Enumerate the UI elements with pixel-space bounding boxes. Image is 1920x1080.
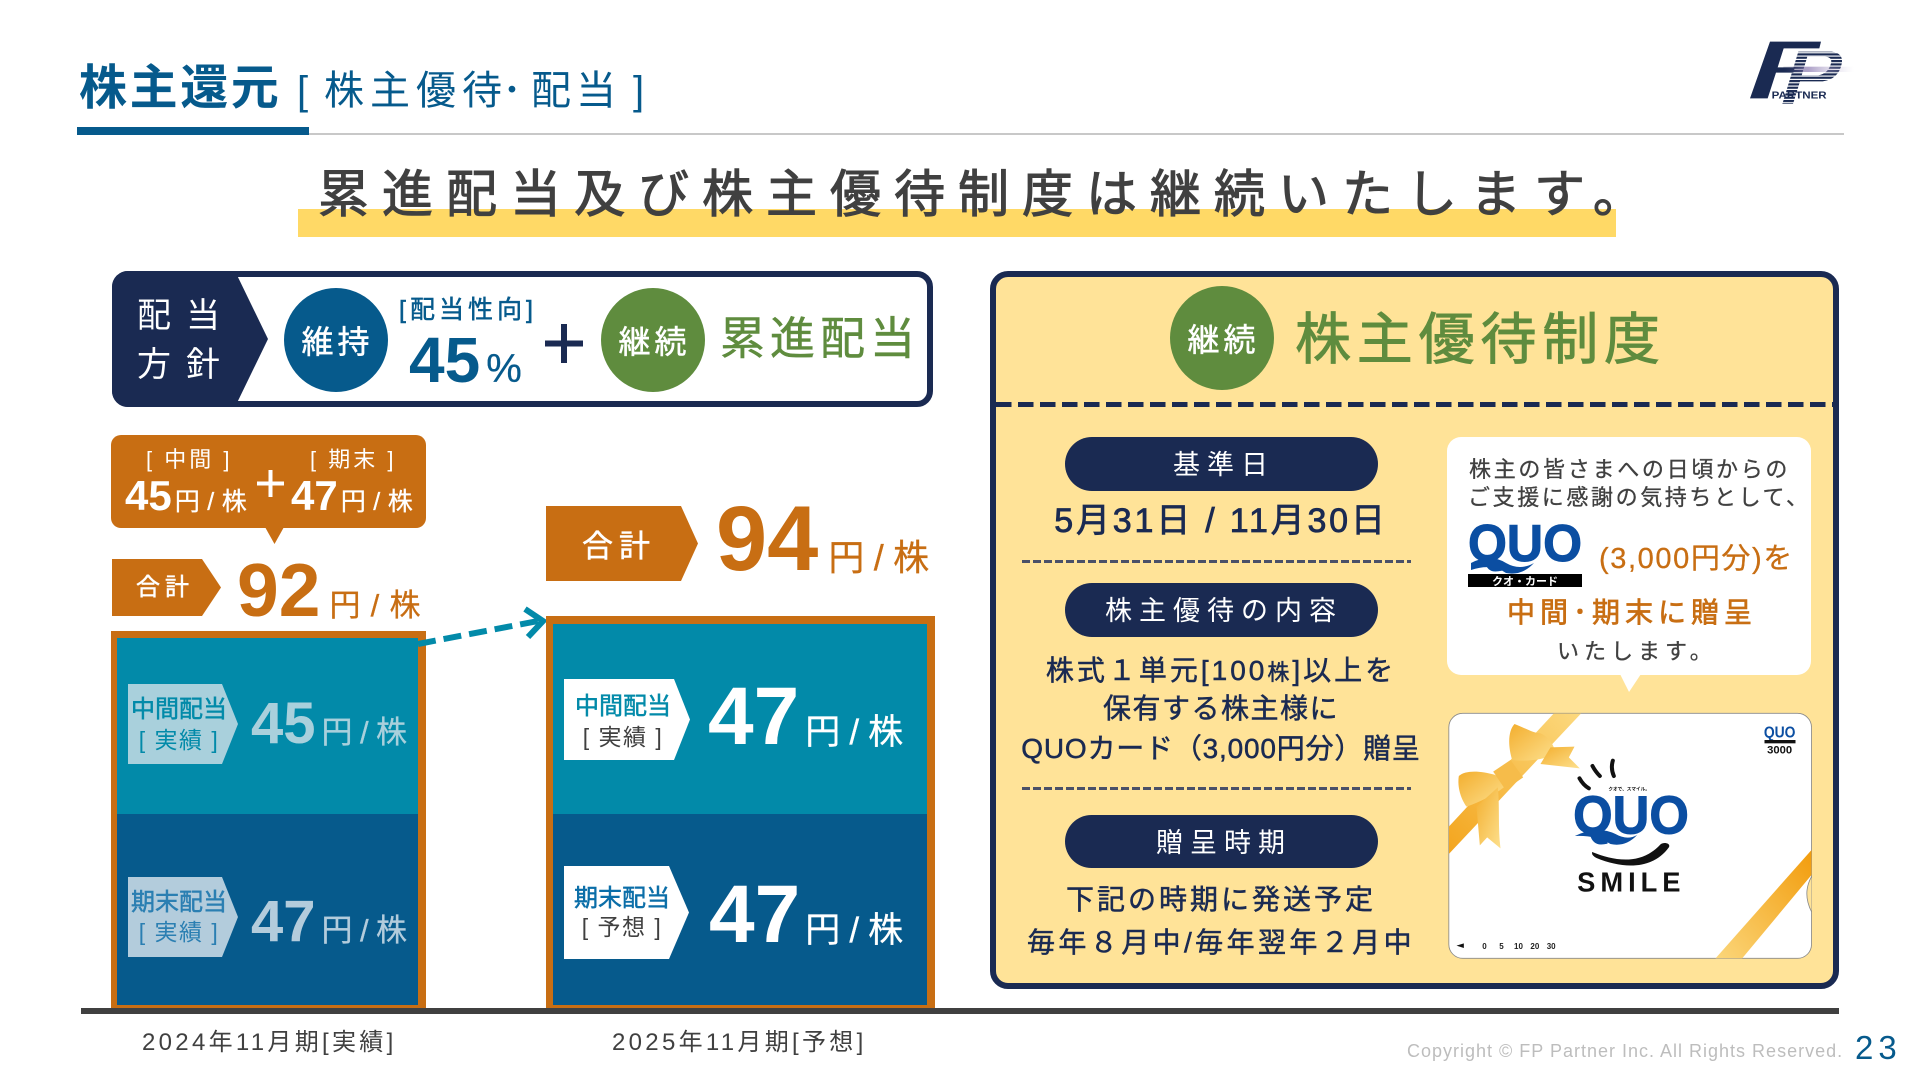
progressive dividend: 累進配当 [720, 313, 920, 364]
pill: gift timing: 贈呈時期 [1156, 828, 1292, 858]
illustration: QUO card [1448, 712, 1812, 959]
speech bubble: ご支援に感謝の気持ちとして、 [1468, 485, 1811, 510]
title sub: [ [297, 69, 308, 113]
headline text: 累進配当及び株主優待制度は継続いたします。 [318, 166, 1657, 223]
policy label arrow: 方針 [137, 346, 235, 384]
pill: gift timing [1065, 815, 1378, 868]
bar segment year-end [117, 814, 418, 1005]
timing description: 下記の時期に発送予定 [1066, 884, 1376, 915]
value interim: 47円 / 株 [708, 671, 903, 762]
payout ratio: 45% [409, 324, 522, 396]
panel: shareholder benefits [990, 271, 1839, 989]
bar: FY2025 [546, 616, 935, 1008]
benefit description: 保有する株主様に [1103, 693, 1339, 724]
gifted at interim and year-end: 中間･期末に贈呈 [1507, 597, 1757, 628]
illustration: QUO card: 3000 [1767, 744, 1792, 756]
interim amount: 45円 / 株 [125, 472, 247, 519]
badge: maintain: 維持 [301, 324, 374, 360]
copyright: Copyright © FP Partner Inc. All Rights Reserved. [1407, 1041, 1843, 1061]
timing description [1027, 884, 1415, 958]
pill: record date: 基準日 [1173, 450, 1275, 480]
chart baseline [81, 1008, 1839, 1014]
badge: continue [1170, 286, 1274, 390]
value interim: 45円/株 [251, 691, 407, 756]
title sub: ] [633, 69, 644, 113]
arrow: dashed growth [418, 606, 546, 647]
value year-end: 47円/株 [251, 889, 407, 954]
timing description: 毎年８月中/毎年翌年２月中 [1027, 927, 1415, 958]
benefit description: QUOカード（3,000円分）贈呈 [1021, 733, 1421, 764]
pill: benefit content [1065, 583, 1378, 637]
headline highlight [298, 209, 1616, 237]
pill: record date [1065, 437, 1378, 491]
title underline [77, 127, 309, 135]
tag year-end actual: 期末配当 [131, 889, 227, 916]
tag year-end actual: [ 実績 ] [139, 919, 219, 945]
total label 2024 [112, 559, 221, 616]
payout ratio [399, 296, 537, 396]
panel: dividend policy [112, 271, 933, 407]
speech bubble [1447, 437, 1811, 692]
interim label: [ 中間 ] [146, 447, 232, 472]
total label 2025 [546, 506, 698, 581]
title sub: 株主優待 [324, 69, 508, 113]
tag interim actual [128, 684, 238, 764]
headline [298, 166, 1657, 237]
axis label 2024: 2024年11月期[実績] [142, 1029, 397, 1056]
total label 2024: 合計 [136, 574, 194, 601]
illustration: QUO card: クオで、スマイル。 [1608, 785, 1650, 792]
tag year-end forecast: 期末配当 [574, 885, 670, 912]
plus sign [545, 324, 583, 363]
policy label arrow [112, 271, 268, 407]
illustration: QUO card: 10 [1514, 942, 1523, 951]
badge: continue [601, 288, 705, 392]
amount: (3,000円分)を [1599, 543, 1794, 575]
title [77, 62, 644, 135]
payout ratio: [配当性向] [399, 296, 537, 324]
panel title: 株主優待制度 [1295, 308, 1666, 371]
total label 2025: 合計 [582, 529, 656, 564]
illustration: QUO card: SMILE [1577, 867, 1680, 898]
callout: interim plus year-end [111, 435, 426, 544]
illustration: QUO card: 0 [1482, 942, 1487, 951]
tag interim actual: 中間配当 [575, 693, 671, 720]
benefit description [1021, 655, 1421, 764]
bar segment interim [553, 624, 927, 814]
value year-end: 47円 / 株 [709, 869, 903, 960]
axis label 2025: 2025年11月期[予想] [612, 1029, 867, 1056]
bubble intro: 株主の皆さまへの日頃からの [1469, 457, 1790, 482]
record dates: 5月31日 / 11月30日 [1054, 502, 1388, 540]
illustration: QUO card: QUO [1764, 724, 1795, 741]
pill: benefit content: 株主優待の内容 [1105, 596, 1343, 626]
closing: いたします。 [1557, 639, 1717, 664]
bar segment interim [117, 638, 418, 814]
tag interim actual [564, 679, 690, 760]
illustration: QUO card: 30 [1547, 942, 1556, 951]
illustration: QUO card: 5 [1499, 942, 1504, 951]
tag interim actual: 中間配当 [131, 696, 227, 723]
logo: FP Partner [1750, 42, 1846, 104]
year-end amount: 47円 / 株 [291, 472, 413, 519]
tag interim actual: [ 実績 ] [583, 724, 663, 750]
tag year-end actual [128, 877, 238, 957]
badge: continue: 継続 [618, 324, 690, 360]
benefit description: 株式１単元[100株]以上を [1046, 655, 1396, 686]
total value 2025: 94 円 / 株 [716, 488, 929, 590]
plus [257, 470, 284, 497]
logo: FP Partner: PARTNER [1772, 91, 1827, 102]
year-end label: [ 期末 ] [310, 447, 396, 472]
tag interim actual: [ 実績 ] [139, 727, 219, 753]
title sub [297, 69, 644, 113]
title sub: 配当 [531, 69, 621, 113]
illustration: QUO card: 20 [1530, 942, 1540, 951]
illustration: QUO card: QUO [1573, 786, 1689, 845]
bar segment year-end [553, 814, 927, 1005]
page number: 23 [1855, 1029, 1902, 1066]
total value 2024: 92 円 / 株 [237, 548, 420, 632]
policy label arrow: 配当 [137, 297, 235, 335]
tag year-end forecast: [ 予想 ] [582, 914, 662, 940]
title main: 株主還元 [79, 62, 281, 115]
title sub: ･ [502, 69, 522, 113]
smile ticks [1580, 761, 1614, 788]
icon: QUO card logo: クオ・カード [1492, 575, 1558, 588]
badge: continue: 継続 [1187, 322, 1260, 358]
ribbon bow [1458, 724, 1580, 848]
badge: maintain [284, 288, 388, 392]
bar: FY2024 [111, 631, 426, 1008]
tag year-end forecast [564, 866, 689, 959]
